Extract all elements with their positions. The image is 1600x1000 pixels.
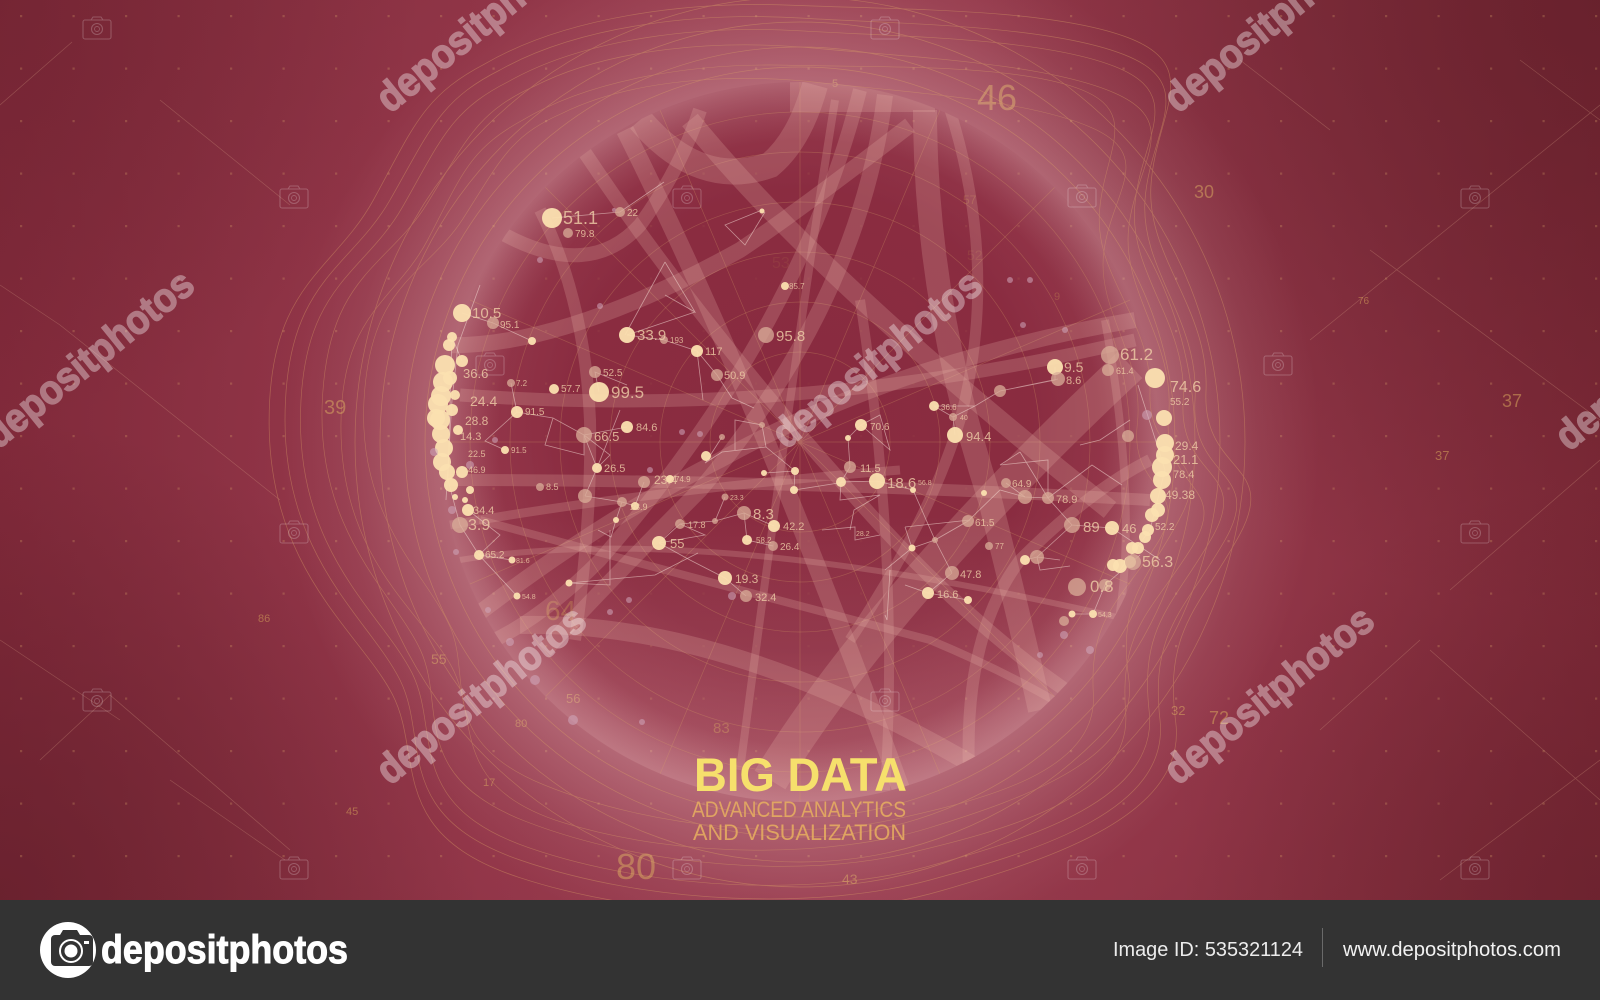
background numbers: 57 — [963, 193, 977, 207]
node value labels: 56.3 — [1142, 554, 1173, 571]
node value labels: 61.5 — [975, 518, 995, 529]
data nodes — [447, 207, 1152, 725]
node value labels: 8.3 — [753, 506, 774, 523]
right edge data cluster: 49.38 — [1165, 488, 1195, 502]
node value labels: 54.8 — [522, 594, 536, 601]
node value labels: 94.4 — [966, 429, 991, 444]
background numbers: 72 — [1209, 708, 1229, 728]
background numbers: 86 — [258, 613, 270, 625]
node value labels: 77 — [995, 542, 1004, 551]
background numbers: 37 — [1435, 448, 1449, 463]
watermarks: depositphotos — [367, 596, 595, 793]
node value labels: 54.3 — [1098, 612, 1112, 619]
node value labels: 78.9 — [1056, 494, 1077, 506]
left edge data cluster — [427, 339, 497, 555]
background numbers: 76 — [1358, 296, 1370, 307]
node value labels: 52.5 — [603, 368, 623, 379]
node value labels: 10.5 — [472, 305, 501, 322]
node value labels: 55 — [670, 536, 684, 551]
node value labels: 17.8 — [688, 520, 706, 530]
subtitle — [692, 797, 906, 845]
right edge data cluster: 29.4 — [1175, 439, 1199, 453]
node value labels: 23.3 — [730, 495, 744, 502]
node value labels: 95.1 — [500, 320, 520, 331]
node value labels: 28.9 — [630, 502, 648, 512]
left edge data cluster: 46.9 — [468, 465, 486, 475]
node value labels: 95.8 — [776, 328, 805, 345]
sphere glow — [280, 0, 1320, 962]
node value labels: 19.3 — [735, 572, 759, 586]
node value labels: 57.7 — [561, 384, 581, 395]
background numbers: 46 — [977, 77, 1017, 118]
node value labels: 42.2 — [783, 521, 804, 533]
node value labels: 3.9 — [468, 517, 490, 534]
background numbers: 32 — [1171, 703, 1185, 718]
watermark camera icons — [83, 17, 1489, 879]
footer logo icon — [40, 922, 96, 978]
right edge data cluster: 52.2 — [1155, 522, 1175, 533]
background numbers: 9 — [1054, 291, 1060, 303]
node value labels: 28.2 — [856, 531, 870, 538]
node value labels: 91.5 — [511, 446, 527, 455]
title: Big Data: BIG DATA — [694, 748, 907, 801]
left edge data cluster: 24.4 — [470, 393, 497, 409]
background numbers: 83 — [713, 720, 730, 737]
node value labels: 61.4 — [1116, 366, 1134, 376]
node value labels: 66.5 — [594, 429, 619, 444]
subtitle: ADVANCED ANALYTICS — [692, 797, 906, 822]
node value labels: 22 — [627, 208, 639, 219]
node value labels: 32.4 — [755, 592, 776, 604]
node value labels: 50.9 — [724, 370, 745, 382]
node value labels: 18.6 — [887, 475, 916, 492]
left edge data cluster: 28.8 — [465, 414, 489, 428]
node value labels: 23.4 — [654, 473, 678, 487]
background numbers: 17 — [483, 777, 495, 789]
node value labels: 40 — [960, 415, 968, 422]
divider — [1322, 928, 1323, 967]
node value labels: 65.2 — [485, 550, 505, 561]
node value labels: 193 — [670, 336, 684, 345]
footer bar — [0, 900, 1600, 1000]
node value labels: 81.6 — [516, 558, 530, 565]
footer logo wordmark: depositphotos — [101, 928, 348, 972]
node value labels: 84.6 — [636, 422, 657, 434]
right edge data cluster: 74.6 — [1170, 379, 1201, 396]
node value labels: 91.5 — [525, 407, 545, 418]
watermarks: depositphotos — [763, 260, 991, 457]
background numbers: 80 — [515, 718, 527, 730]
right edge data cluster — [1107, 368, 1201, 573]
right edge data cluster: 21.1 — [1173, 452, 1198, 467]
node value labels: 70.6 — [870, 422, 890, 433]
background numbers: 53 — [772, 255, 790, 272]
node value labels: 117 — [705, 346, 723, 358]
sphere interior — [440, 65, 1160, 802]
node value labels: 8.5 — [546, 482, 559, 492]
left edge data cluster: 36.6 — [463, 366, 488, 381]
background numbers: 52 — [967, 247, 983, 263]
right edge data cluster: 55.2 — [1170, 397, 1190, 408]
watermarks: depositphotos — [1155, 596, 1383, 793]
right edge data cluster: 78.4 — [1173, 469, 1194, 481]
node value labels: 8.6 — [1066, 375, 1081, 387]
node value labels: 7.2 — [516, 379, 528, 388]
watermarks — [0, 0, 1600, 793]
background numbers: 45 — [346, 806, 358, 818]
background numbers: 37 — [1502, 391, 1522, 411]
node value labels: 26.5 — [604, 463, 625, 475]
node value labels: 51.1 — [563, 208, 598, 228]
wobbly contour rings — [262, 0, 1258, 922]
background numbers: 64 — [545, 595, 576, 626]
node value labels: 33.9 — [637, 327, 666, 344]
node value labels: 36.6 — [941, 403, 957, 412]
network connections — [446, 182, 1165, 620]
left edge data cluster: 14.3 — [460, 431, 481, 443]
subtitle: AND VISUALIZATION — [693, 820, 906, 845]
node value labels: 26.4 — [780, 542, 800, 553]
node value labels — [468, 208, 1173, 619]
node value labels: 0.8 — [1090, 577, 1114, 596]
background numbers: 80 — [616, 846, 656, 887]
background numbers: 55 — [431, 651, 447, 667]
sphere grid — [440, 82, 1160, 802]
node value labels: 85.7 — [789, 282, 805, 291]
node value labels: 46 — [1122, 521, 1136, 536]
background numbers — [258, 77, 1522, 887]
data flow bands — [440, 85, 1150, 800]
node value labels: 58.2 — [756, 536, 772, 545]
background numbers: 30 — [1194, 182, 1214, 202]
node value labels: 16.6 — [937, 589, 958, 601]
node value labels: 64.9 — [1012, 479, 1032, 490]
node value labels: 74.9 — [675, 475, 691, 484]
node value labels: 79.8 — [575, 229, 595, 240]
node value labels: 9.5 — [1064, 359, 1084, 375]
background numbers: 39 — [324, 397, 346, 419]
background numbers: 5 — [832, 78, 838, 90]
background numbers: 56 — [566, 691, 580, 706]
node value labels: 47.8 — [960, 569, 981, 581]
node value labels: 61.2 — [1120, 345, 1153, 364]
node value labels: 34.4 — [473, 505, 494, 517]
node value labels: 56.8 — [918, 480, 932, 487]
node value labels: 99.5 — [611, 383, 644, 402]
background numbers: 43 — [842, 871, 858, 887]
left edge data cluster: 22.5 — [468, 449, 486, 459]
image id: Image ID: 535321124 — [1113, 938, 1303, 961]
node value labels: 89 — [1083, 519, 1100, 536]
website: www.depositphotos.com — [1342, 938, 1561, 961]
node value labels: 11.5 — [860, 463, 881, 475]
